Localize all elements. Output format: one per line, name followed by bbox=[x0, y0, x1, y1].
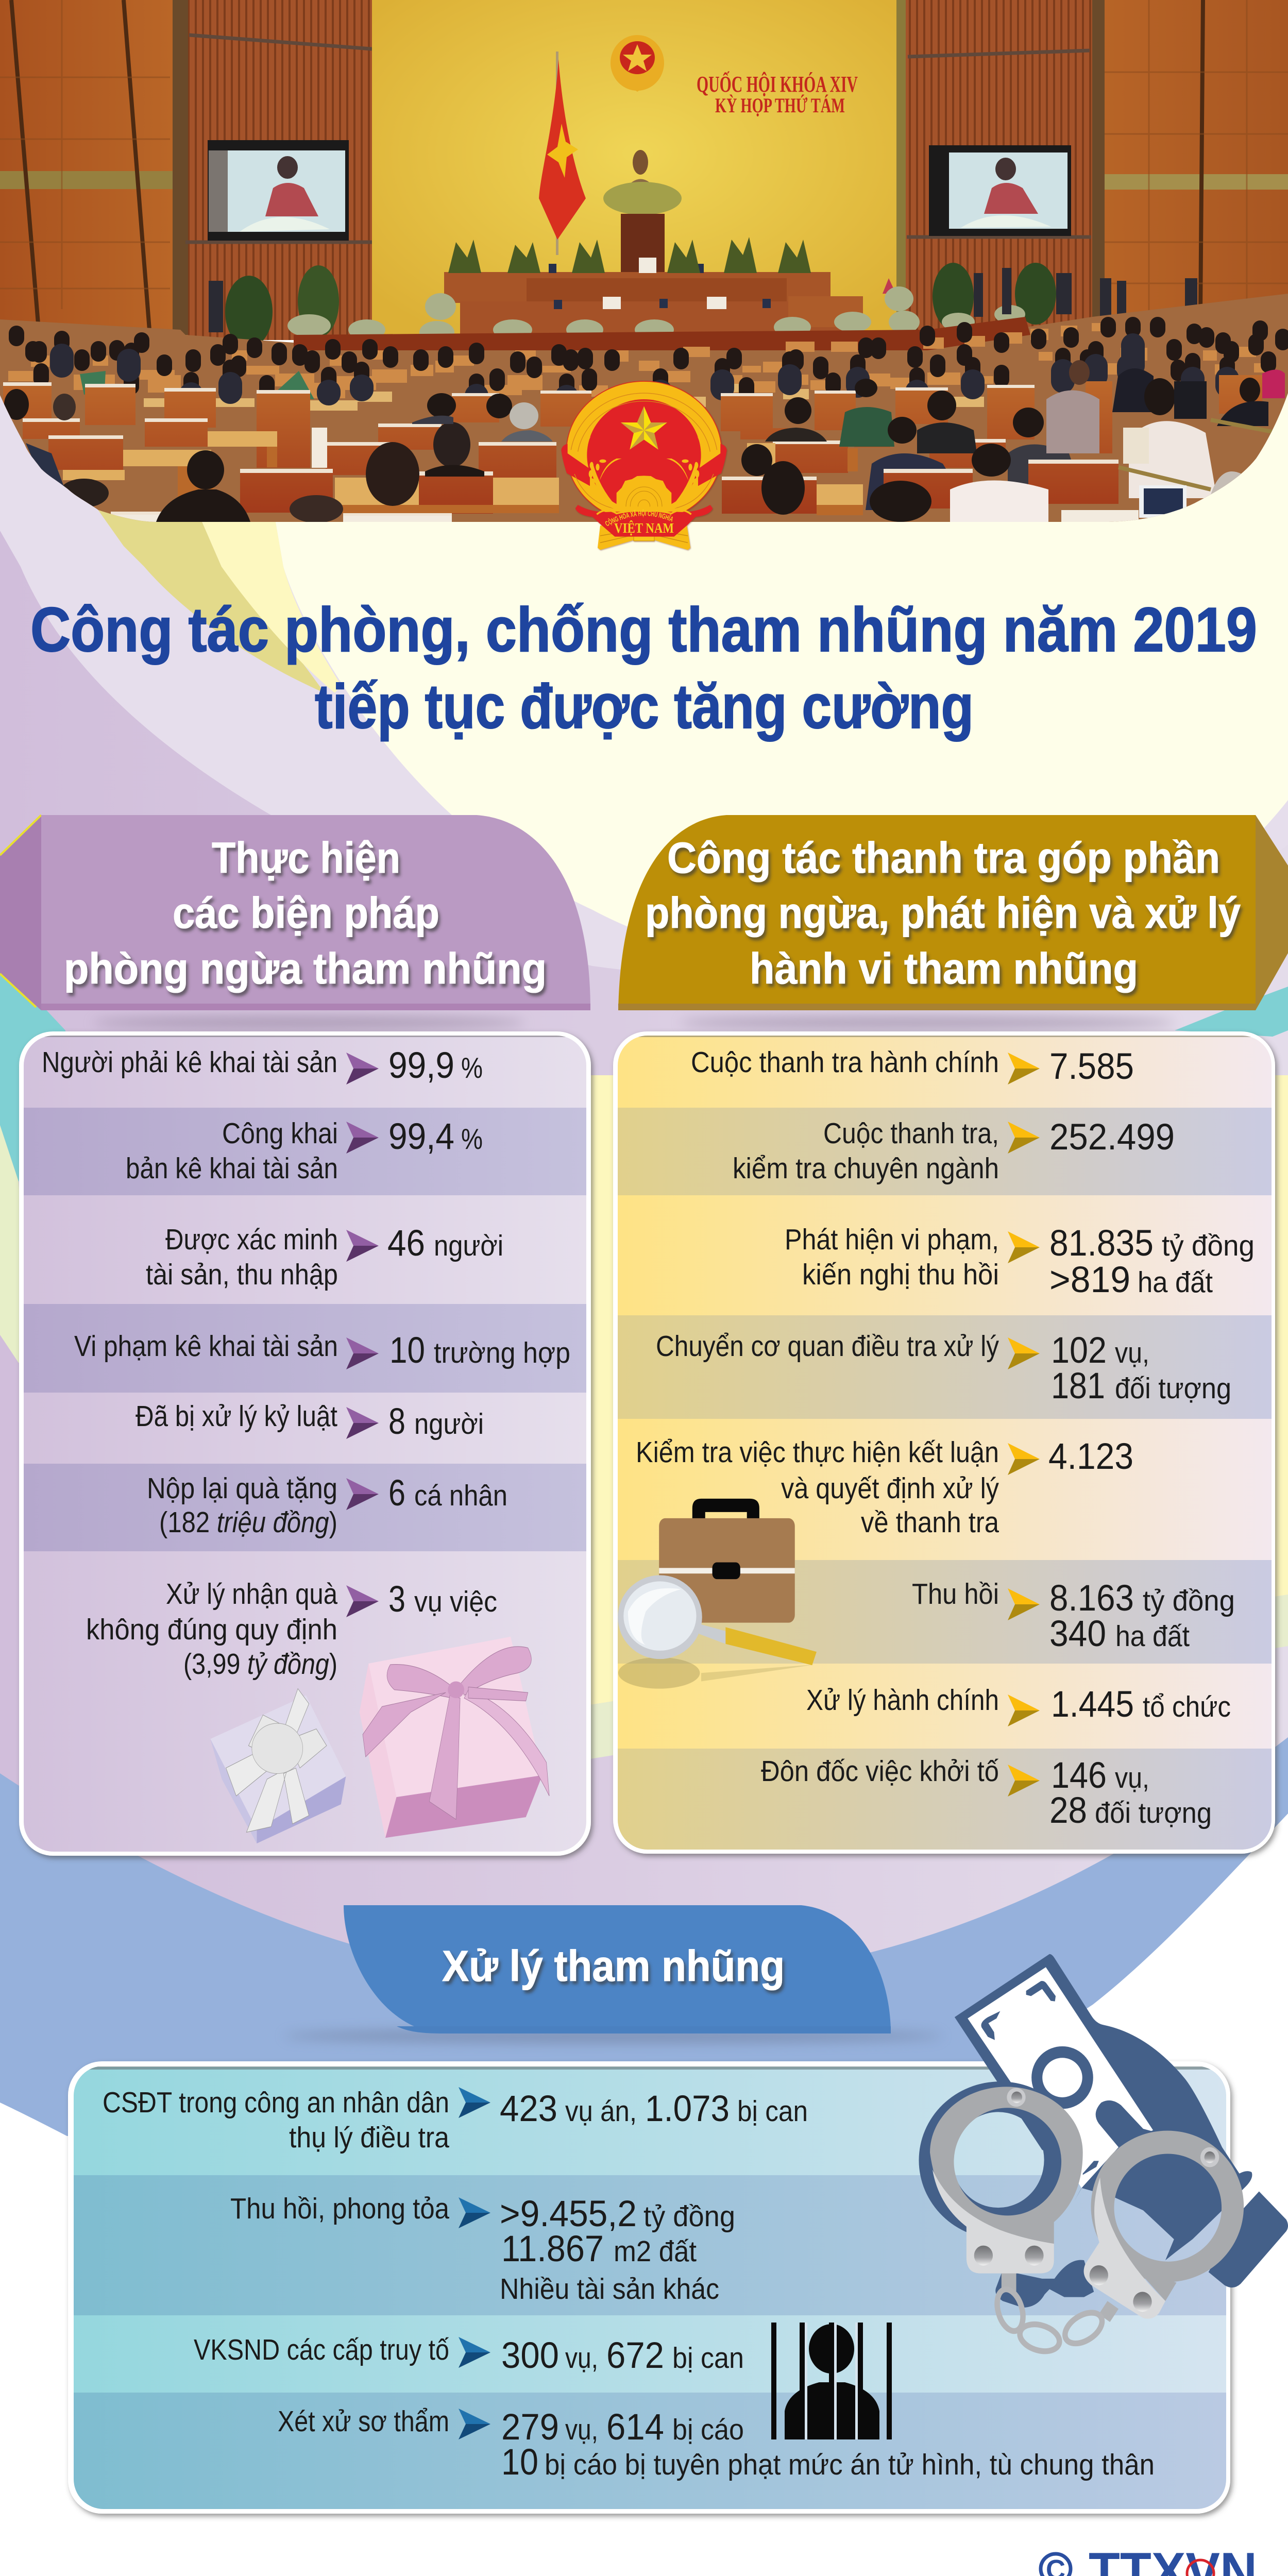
prevention values: 3 bbox=[388, 1579, 405, 1620]
handling values: 614 bbox=[606, 2407, 664, 2448]
icon: white gift box bbox=[210, 1689, 346, 1843]
handling labels: VKSND các cấp truy tố bbox=[194, 2333, 449, 2366]
national emblem bbox=[561, 381, 727, 550]
inspection arrows bbox=[1008, 1053, 1040, 1797]
handling labels: CSĐT trong công an nhân dân bbox=[103, 2086, 449, 2119]
inspection values: 102 bbox=[1051, 1330, 1107, 1371]
emblem inscription: VIỆT NAM bbox=[614, 520, 674, 536]
icon: sleeve bbox=[1209, 2191, 1288, 2287]
handling values: vụ, bbox=[565, 2342, 598, 2375]
inspection labels: và quyết định xử lý bbox=[781, 1472, 999, 1505]
handling values: bị cáo bị tuyên phạt mức án tử hình, tù chung thân bbox=[545, 2448, 1155, 2481]
prevention rows bbox=[24, 1033, 586, 1855]
panel heading: inspection: phòng ngừa, phát hiện và xử lý bbox=[645, 889, 1241, 937]
header photo: National Assembly hall bbox=[0, 0, 1288, 523]
handling values: bị cáo bbox=[672, 2413, 744, 2446]
icon: magnifier bbox=[618, 1575, 817, 1689]
inspection labels: Thu hồi bbox=[912, 1578, 999, 1611]
prevention labels: (182 triệu đồng) bbox=[159, 1506, 337, 1539]
prevention labels: bản kê khai tài sản bbox=[126, 1152, 338, 1185]
large seat backs bbox=[3, 375, 1262, 514]
prevention values: 8 bbox=[388, 1401, 405, 1442]
emblem bottom scroll bbox=[575, 505, 713, 537]
prevention labels: Đã bị xử lý kỷ luật bbox=[135, 1400, 337, 1433]
prevention labels: tài sản, thu nhập bbox=[146, 1258, 338, 1291]
stage bbox=[444, 258, 896, 340]
wall inscription: KỲ HỌP THỨ TÁM bbox=[715, 94, 845, 117]
inspection values: đối tượng bbox=[1095, 1797, 1212, 1829]
prevention labels: Công khai bbox=[222, 1117, 338, 1150]
inspection labels: Phát hiện vi phạm, bbox=[785, 1223, 999, 1256]
handling values: 10 bbox=[501, 2442, 538, 2483]
prevention labels: Xử lý nhận quà bbox=[166, 1578, 337, 1611]
inspection values: vụ, bbox=[1115, 1761, 1149, 1794]
title bbox=[30, 595, 1257, 741]
panel heading: prevention: Thực hiện bbox=[212, 834, 400, 882]
prevention values: cá nhân bbox=[414, 1479, 507, 1512]
emblem gold wreath bbox=[566, 381, 722, 522]
handling values: 423 bbox=[500, 2089, 557, 2129]
prevention values: người bbox=[414, 1408, 484, 1440]
emblem gear bbox=[617, 476, 671, 510]
handling values: bị can bbox=[672, 2342, 744, 2375]
prevention labels: (3,99 tỷ đồng) bbox=[183, 1648, 337, 1681]
inspection values: ha đất bbox=[1138, 1266, 1213, 1299]
prevention labels bbox=[42, 1046, 338, 1681]
emblem star bbox=[621, 406, 667, 450]
inspection labels: kiến nghị thu hồi bbox=[802, 1258, 999, 1291]
central yellow wall bbox=[372, 0, 903, 340]
emblem base rods bbox=[598, 526, 690, 550]
prevention arrows bbox=[346, 1053, 379, 1617]
handling labels: thụ lý điều tra bbox=[289, 2121, 449, 2154]
back rows of people bbox=[16, 325, 1283, 392]
handling values: Nhiều tài sản khác bbox=[500, 2273, 719, 2306]
inspection values: 1.445 bbox=[1051, 1684, 1134, 1725]
emblem inscription: CỘNG HÒA XÃ HỘI CHỦ NGHĨA bbox=[605, 509, 673, 526]
inspection labels: Cuộc thanh tra, bbox=[823, 1117, 999, 1150]
panel heading: inspection: hành vi tham nhũng bbox=[750, 944, 1138, 993]
front audience members bbox=[4, 360, 1285, 523]
icon: prisoner behind bars bbox=[771, 2323, 892, 2439]
inspection values: >819 bbox=[1049, 1260, 1130, 1300]
inspection values bbox=[1048, 1046, 1255, 1831]
prevention values: 10 bbox=[389, 1330, 425, 1371]
speakers and standing staff bbox=[209, 268, 1197, 332]
inspection labels: kiểm tra chuyên ngành bbox=[733, 1152, 999, 1185]
icon: gifts bbox=[210, 1637, 549, 1843]
handling values: tỷ đồng bbox=[643, 2200, 735, 2233]
icon: right cuff bbox=[1084, 2131, 1244, 2319]
handling rows bbox=[74, 2066, 1226, 2510]
inspection values: 81.835 bbox=[1049, 1223, 1154, 1264]
prevention values bbox=[387, 1045, 570, 1620]
prevention values: % bbox=[461, 1123, 483, 1156]
handling labels bbox=[103, 2086, 449, 2438]
copyright mark bbox=[1041, 2554, 1071, 2576]
inspection values: tỷ đồng bbox=[1143, 1584, 1235, 1617]
handling values: vụ án, bbox=[565, 2095, 637, 2128]
panel: inspection results bbox=[613, 1031, 1275, 1854]
prevention values: % bbox=[461, 1052, 483, 1084]
handling values: >9.455,2 bbox=[500, 2194, 637, 2234]
inspection values: 340 bbox=[1049, 1614, 1106, 1654]
icon: chain bbox=[993, 2260, 1118, 2355]
inspection values: ha đất bbox=[1115, 1620, 1190, 1653]
icon: banknote bbox=[968, 1967, 1153, 2188]
prevention labels: Được xác minh bbox=[165, 1223, 338, 1256]
inspection values: vụ, bbox=[1115, 1336, 1149, 1369]
heading: handling corruption: Xử lý tham nhũng bbox=[442, 1942, 785, 1990]
wall inscription bbox=[697, 71, 858, 117]
inspection values: 8.163 bbox=[1049, 1578, 1134, 1619]
panel heading: prevention: phòng ngừa tham nhũng bbox=[64, 944, 547, 993]
panel heading: inspection: Công tác thanh tra góp phần bbox=[667, 834, 1220, 882]
emblem rice ears bbox=[584, 436, 704, 509]
right video screen bbox=[929, 145, 1071, 236]
globe mark bbox=[1187, 2560, 1214, 2576]
audience base bbox=[0, 294, 1288, 522]
table edges bbox=[144, 384, 984, 411]
emblem side banners bbox=[561, 444, 590, 486]
handling labels: Thu hồi, phong tỏa bbox=[230, 2192, 449, 2225]
inspection values: đối tượng bbox=[1115, 1372, 1231, 1405]
panel heading: inspection bbox=[618, 815, 1288, 1030]
icon: briefcase bbox=[659, 1499, 795, 1623]
prevention values: người bbox=[434, 1229, 503, 1262]
inspection labels: Xử lý hành chính bbox=[806, 1684, 999, 1717]
tablet bbox=[1139, 485, 1187, 518]
icon: handcuffs and money in hand bbox=[919, 1954, 1288, 2355]
back rows of seats bbox=[8, 323, 1270, 398]
prevention values: vụ việc bbox=[414, 1585, 497, 1618]
inspection values: tổ chức bbox=[1143, 1690, 1231, 1723]
prevention values: 99,4 bbox=[388, 1116, 454, 1157]
left and right walls bbox=[0, 0, 1288, 361]
wall inscription: QUỐC HỘI KHÓA XIV bbox=[697, 71, 858, 97]
wreath detail lines bbox=[571, 393, 717, 509]
panel heading: prevention bbox=[0, 815, 590, 1030]
handling values: bị can bbox=[737, 2095, 808, 2128]
handling values: 1.073 bbox=[645, 2089, 730, 2129]
icon: hand and banknote outline bbox=[955, 1954, 1252, 2260]
front desks bbox=[63, 431, 863, 505]
panel: prevention measures bbox=[19, 1031, 591, 1856]
emblem inscription bbox=[605, 509, 674, 536]
green plants on stage bbox=[225, 237, 1056, 348]
railing bbox=[1118, 420, 1278, 489]
handling values: m2 đất bbox=[614, 2235, 697, 2268]
inspection values: 4.123 bbox=[1048, 1436, 1133, 1477]
icon: pink gift box bbox=[360, 1637, 549, 1838]
inspection labels bbox=[636, 1046, 999, 1788]
inspection values: 181 bbox=[1051, 1366, 1105, 1406]
heading: handling corruption bbox=[283, 1905, 943, 2043]
inspection labels: Đôn đốc việc khởi tố bbox=[761, 1755, 999, 1788]
inspection rows bbox=[618, 1033, 1272, 1852]
emblem red field bbox=[587, 399, 701, 511]
prevention values: 46 bbox=[387, 1223, 425, 1264]
left video screen bbox=[208, 140, 349, 241]
prevention labels: Nộp lại quà tặng bbox=[147, 1472, 337, 1505]
handling labels: Xét xử sơ thẩm bbox=[278, 2405, 449, 2438]
prevention labels: Vi phạm kê khai tài sản bbox=[74, 1330, 338, 1363]
inspection values: 28 bbox=[1049, 1790, 1087, 1831]
prevention values: trường hợp bbox=[434, 1336, 570, 1369]
back rows of shoulders bbox=[62, 345, 1227, 399]
flag bbox=[539, 52, 586, 255]
inspection labels: Kiểm tra việc thực hiện kết luận bbox=[636, 1436, 999, 1469]
handling values: 11.867 bbox=[501, 2229, 604, 2269]
inspection values: 252.499 bbox=[1049, 1117, 1175, 1158]
prevention values: 6 bbox=[388, 1473, 405, 1514]
prevention labels: Người phải kê khai tài sản bbox=[42, 1046, 337, 1079]
handling values: vụ, bbox=[565, 2413, 598, 2446]
inspection values: tỷ đồng bbox=[1162, 1229, 1255, 1262]
handling values: 300 bbox=[501, 2335, 559, 2376]
title: tiếp tục được tăng cường bbox=[315, 671, 974, 741]
inspection values: 146 bbox=[1051, 1755, 1107, 1796]
agency logo bbox=[1041, 2542, 1257, 2576]
bust and flowers bbox=[603, 150, 682, 273]
panel heading: prevention: các biện pháp bbox=[173, 889, 439, 937]
panel: handling corruption data bbox=[68, 1954, 1288, 2514]
inspection values: 7.585 bbox=[1049, 1046, 1134, 1087]
inspection labels: về thanh tra bbox=[861, 1506, 999, 1539]
icon: left cuff bbox=[919, 2081, 1083, 2274]
prevention values: 99,9 bbox=[388, 1045, 454, 1086]
white flower pots bbox=[287, 286, 1025, 344]
inspection labels: Chuyển cơ quan điều tra xử lý bbox=[656, 1330, 999, 1363]
icon: briefcase and magnifier bbox=[618, 1499, 817, 1689]
seat top highlights bbox=[3, 382, 1118, 516]
prevention labels: không đúng quy định bbox=[86, 1613, 337, 1646]
handling values: 672 bbox=[606, 2335, 664, 2376]
inspection labels: Cuộc thanh tra hành chính bbox=[691, 1046, 999, 1079]
handling values: 279 bbox=[501, 2407, 559, 2448]
handling arrows bbox=[459, 2087, 490, 2439]
wall crest bbox=[611, 35, 664, 92]
handling values bbox=[500, 2089, 1155, 2483]
